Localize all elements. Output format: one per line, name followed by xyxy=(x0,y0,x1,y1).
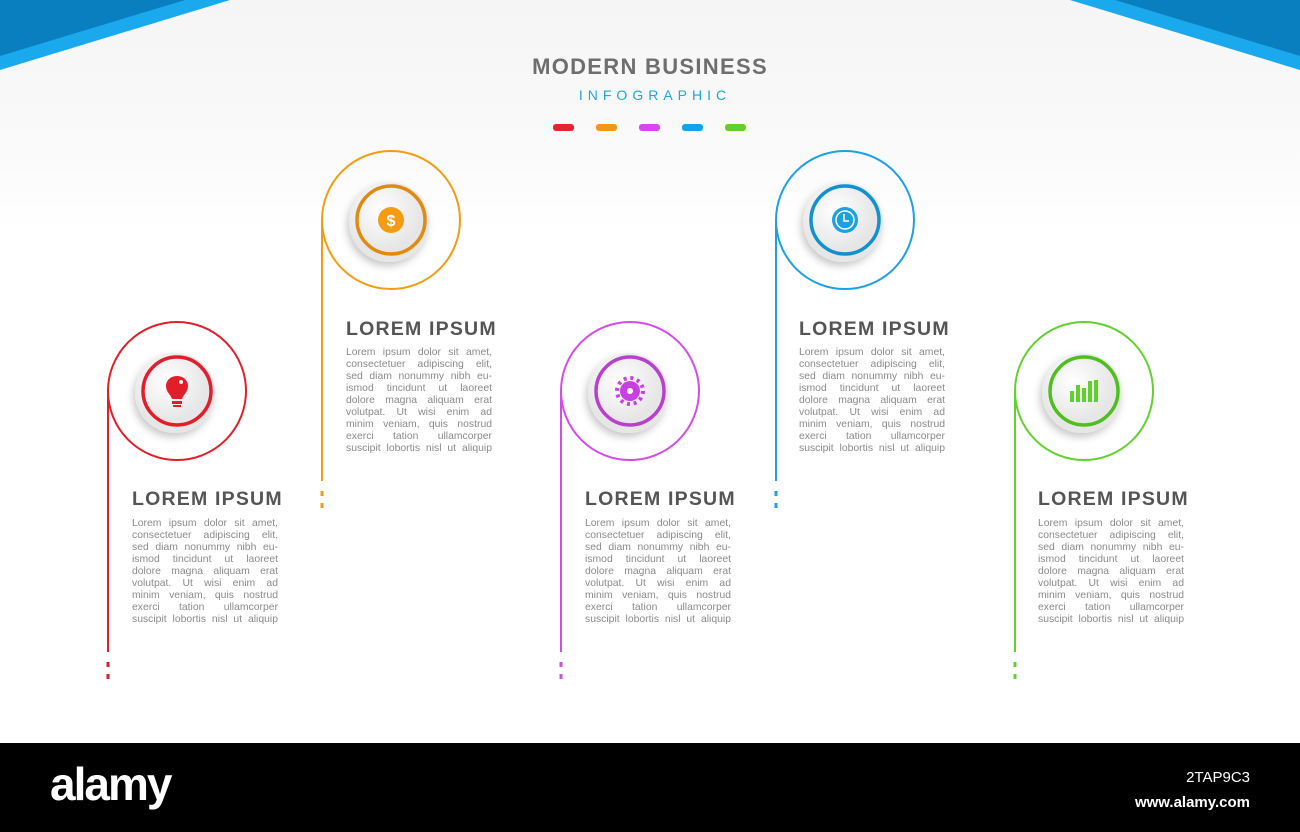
text 2: minim veniam, quis nostrud xyxy=(346,419,492,430)
step 4 blue xyxy=(776,151,914,508)
text 2: exerci tation ullamcorper xyxy=(346,431,492,442)
icon: dollar: $ xyxy=(387,213,396,230)
text 5: volutpat. Ut wisi enim ad xyxy=(1038,578,1184,589)
text 2: sed diam nonummy nibh eu- xyxy=(346,371,492,382)
text 5: suscipit lobortis nisl ut aliquip xyxy=(1038,614,1184,625)
text 1: suscipit lobortis nisl ut aliquip xyxy=(132,614,278,625)
text 1 xyxy=(132,518,278,625)
text 1: dolore magna aliquam erat xyxy=(132,566,278,577)
color dots xyxy=(553,124,746,131)
corner decoration left xyxy=(0,0,230,70)
footer logo: alamy xyxy=(50,758,170,810)
text 1: Lorem ipsum dolor sit amet, xyxy=(132,518,278,529)
step 5 green xyxy=(1015,322,1153,679)
text 3 xyxy=(585,518,731,625)
text 3: ismod tincidunt ut laoreet xyxy=(585,554,731,565)
text 4: dolore magna aliquam erat xyxy=(799,395,945,406)
heading 4: LOREM IPSUM xyxy=(799,318,950,340)
icon: bar chart xyxy=(1070,380,1098,402)
text 1: ismod tincidunt ut laoreet xyxy=(132,554,278,565)
text 3: dolore magna aliquam erat xyxy=(585,566,731,577)
text 4 xyxy=(799,347,945,454)
text 5: Lorem ipsum dolor sit amet, xyxy=(1038,518,1184,529)
text 4: volutpat. Ut wisi enim ad xyxy=(799,407,945,418)
text 3: volutpat. Ut wisi enim ad xyxy=(585,578,731,589)
step 1 red xyxy=(108,322,246,679)
footer id xyxy=(1135,769,1250,811)
text 2: suscipit lobortis nisl ut aliquip xyxy=(346,443,492,454)
text 4: consectetuer adipiscing elit, xyxy=(799,359,945,370)
subtitle: INFOGRAPHIC xyxy=(579,87,731,103)
text 2: dolore magna aliquam erat xyxy=(346,395,492,406)
icon: clock xyxy=(832,207,858,233)
text 1: consectetuer adipiscing elit, xyxy=(132,530,278,541)
text 2: consectetuer adipiscing elit, xyxy=(346,359,492,370)
text 5: ismod tincidunt ut laoreet xyxy=(1038,554,1184,565)
text 5: consectetuer adipiscing elit, xyxy=(1038,530,1184,541)
icon: gear xyxy=(617,378,643,404)
footer id: 2TAP9C3 xyxy=(1186,769,1250,786)
heading 2: LOREM IPSUM xyxy=(346,318,497,340)
step 2 orange xyxy=(322,151,460,508)
text 3: suscipit lobortis nisl ut aliquip xyxy=(585,614,731,625)
text 1: minim veniam, quis nostrud xyxy=(132,590,278,601)
text 3: sed diam nonummy nibh eu- xyxy=(585,542,731,553)
text 4: exerci tation ullamcorper xyxy=(799,431,945,442)
text 3: Lorem ipsum dolor sit amet, xyxy=(585,518,731,529)
text 4: suscipit lobortis nisl ut aliquip xyxy=(799,443,945,454)
text 1: exerci tation ullamcorper xyxy=(132,602,278,613)
footer bar xyxy=(0,743,1300,832)
text 1: volutpat. Ut wisi enim ad xyxy=(132,578,278,589)
heading 3: LOREM IPSUM xyxy=(585,488,736,510)
step 3 purple xyxy=(561,322,699,679)
text 2: Lorem ipsum dolor sit amet, xyxy=(346,347,492,358)
text 5: dolore magna aliquam erat xyxy=(1038,566,1184,577)
text 2: volutpat. Ut wisi enim ad xyxy=(346,407,492,418)
text 1: sed diam nonummy nibh eu- xyxy=(132,542,278,553)
text 3: minim veniam, quis nostrud xyxy=(585,590,731,601)
text 4: sed diam nonummy nibh eu- xyxy=(799,371,945,382)
text 2: ismod tincidunt ut laoreet xyxy=(346,383,492,394)
heading 1: LOREM IPSUM xyxy=(132,488,283,510)
icon: dollar xyxy=(378,207,404,233)
text 4: Lorem ipsum dolor sit amet, xyxy=(799,347,945,358)
text 5: exerci tation ullamcorper xyxy=(1038,602,1184,613)
title: MODERN BUSINESS xyxy=(532,54,768,79)
text 5 xyxy=(1038,518,1184,625)
text 4: minim veniam, quis nostrud xyxy=(799,419,945,430)
text 5: sed diam nonummy nibh eu- xyxy=(1038,542,1184,553)
text 2 xyxy=(346,347,492,454)
text 4: ismod tincidunt ut laoreet xyxy=(799,383,945,394)
icon: bulb xyxy=(166,376,188,407)
text 3: consectetuer adipiscing elit, xyxy=(585,530,731,541)
footer id: www.alamy.com xyxy=(1135,794,1250,811)
text 3: exerci tation ullamcorper xyxy=(585,602,731,613)
heading 5: LOREM IPSUM xyxy=(1038,488,1189,510)
corner decoration right xyxy=(1070,0,1300,70)
text 5: minim veniam, quis nostrud xyxy=(1038,590,1184,601)
